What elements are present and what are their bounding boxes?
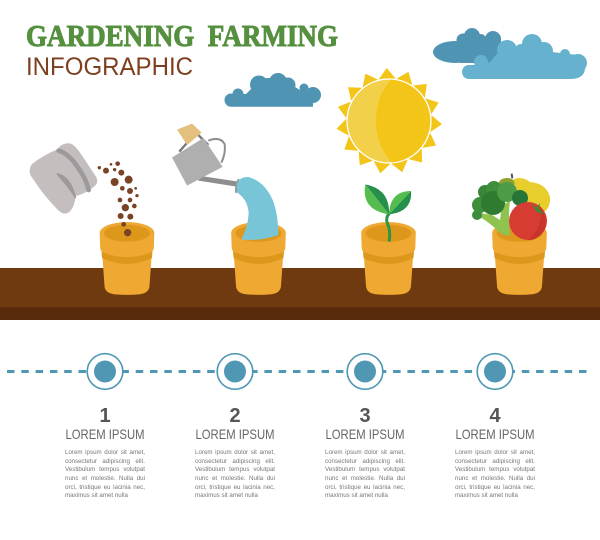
step 2 text block: consectetur adipiscing elit.: [195, 458, 275, 465]
icon: water stream: [237, 177, 278, 240]
title: GARDENING FARMING: [26, 18, 338, 53]
timeline: [7, 354, 592, 389]
step 3 text block: maximus sit amet nulla: [325, 492, 388, 499]
step 4 text block: orci, tristique eu lacinia nec,: [455, 484, 535, 491]
icon: falling soil: [98, 161, 139, 236]
step 1 text block: [65, 449, 145, 499]
step 2 text block: Lorem ipsum dolor sit amet,: [195, 449, 275, 456]
step 2 text block: [195, 449, 275, 499]
cloud: left: [224, 73, 321, 107]
step 4 text block: maximus sit amet nulla: [455, 492, 518, 499]
ground: [0, 268, 600, 320]
pot 3: [361, 222, 416, 295]
pot 4: [492, 222, 547, 295]
step 3 text block: consectetur adipiscing elit.: [325, 458, 405, 465]
step 2 heading: LOREM IPSUM: [196, 426, 274, 442]
pear: [499, 174, 550, 215]
timeline node 4: [477, 354, 513, 389]
sun: [335, 68, 442, 175]
step 1 text block: consectetur adipiscing elit.: [65, 458, 145, 465]
step 1 number: 1: [99, 405, 111, 427]
pot 1: [100, 222, 154, 295]
timeline node 1: [87, 354, 123, 389]
step 2 text block: orci, tristique eu lacinia nec,: [195, 484, 275, 491]
step 1 text block: orci, tristique eu lacinia nec,: [65, 484, 145, 491]
cloud: upper right dark: [433, 28, 501, 63]
step 4 text block: [455, 449, 535, 499]
step 3 text block: [325, 449, 405, 499]
cloud: upper right light: [462, 34, 587, 79]
icon: seed bag: [30, 143, 97, 214]
step 2 text block: maximus sit amet nulla: [195, 492, 258, 499]
pot 2: [231, 222, 286, 295]
step 4 text block: Lorem ipsum dolor sit amet,: [455, 449, 535, 456]
icon: vegetables: [472, 174, 550, 240]
step 3 text block: Vestibulum tempus volutpat: [325, 466, 405, 473]
step 4 text block: consectetur adipiscing elit.: [455, 458, 535, 465]
step 1 text block: maximus sit amet nulla: [65, 492, 128, 499]
step 2 number: 2: [229, 405, 241, 427]
step 1 text block: Vestibulum tempus volutpat: [65, 466, 145, 473]
step 1 text block: Lorem ipsum dolor sit amet,: [65, 449, 145, 456]
timeline node 2: [217, 354, 253, 389]
broccoli: [472, 181, 528, 236]
subtitle: INFOGRAPHIC: [26, 53, 193, 81]
step 1 heading: LOREM IPSUM: [66, 426, 144, 442]
step 3 text block: nunc et molestie. Nulla dui: [325, 475, 405, 482]
step 3 number: 3: [359, 405, 371, 427]
step 3 text block: Lorem ipsum dolor sit amet,: [325, 449, 405, 456]
step 3 heading: LOREM IPSUM: [326, 426, 404, 442]
step 4 text block: Vestibulum tempus volutpat: [455, 466, 535, 473]
step 4 heading: LOREM IPSUM: [456, 426, 534, 442]
step 2 text block: nunc et molestie. Nulla dui: [195, 475, 275, 482]
icon: watering can: [173, 124, 241, 194]
timeline node 3: [347, 354, 383, 389]
step 4 text block: nunc et molestie. Nulla dui: [455, 475, 535, 482]
step 2 text block: Vestibulum tempus volutpat: [195, 466, 275, 473]
step 4 number: 4: [489, 405, 501, 427]
tomato: [509, 202, 547, 240]
step 3 text block: orci, tristique eu lacinia nec,: [325, 484, 405, 491]
step 1 text block: nunc et molestie. Nulla dui: [65, 475, 145, 482]
icon: seedling: [365, 184, 411, 240]
